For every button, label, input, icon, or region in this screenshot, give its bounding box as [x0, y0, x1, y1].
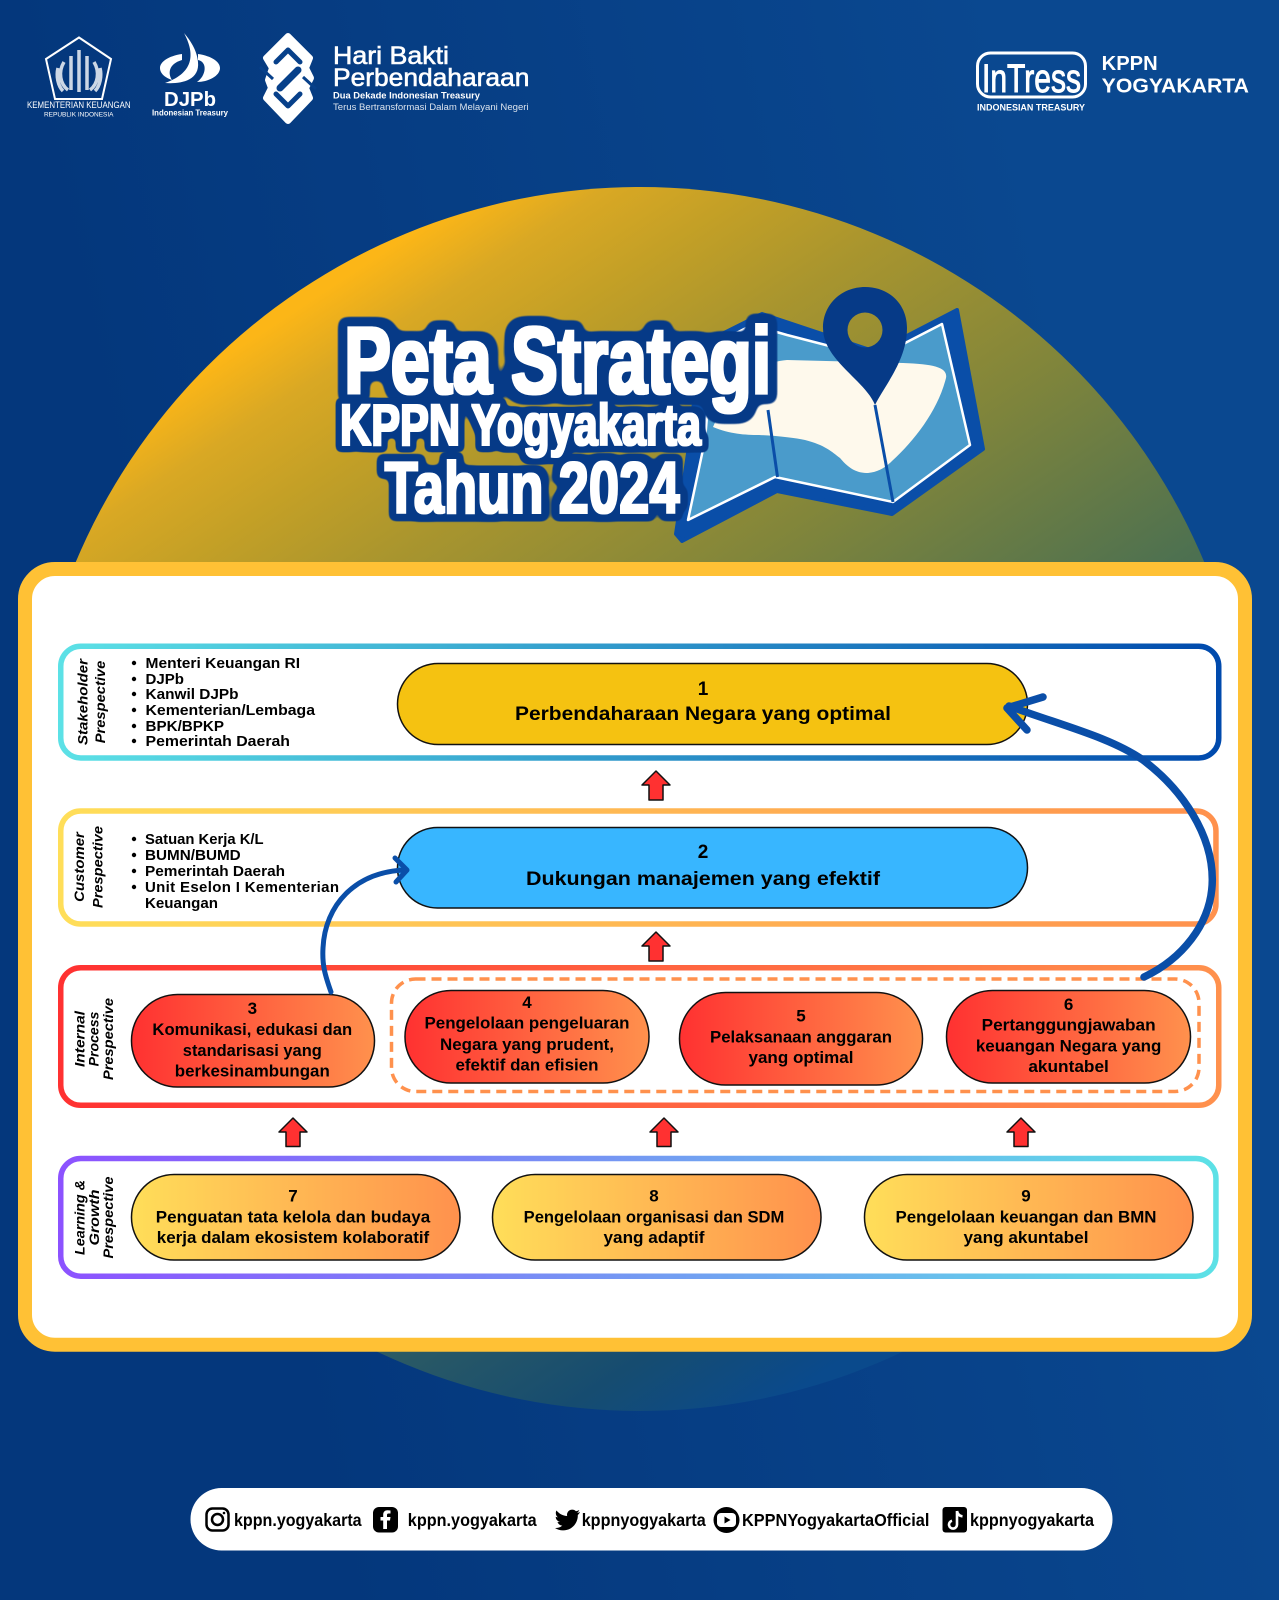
- objective 8: [492, 1174, 821, 1260]
- customer list: Unit Eselon I Kementerian: [145, 879, 339, 896]
- handle: tiktok: kppnyogyakarta: [970, 1510, 1094, 1530]
- logo: Kementerian Keuangan: [27, 38, 131, 119]
- objective 6: [946, 990, 1190, 1083]
- text: KPPN Yogyakarta: [1102, 53, 1249, 98]
- customer list: [132, 831, 339, 912]
- objective 6: 6: [1064, 995, 1073, 1014]
- objective 5: Pelaksanaan anggaran: [710, 1029, 892, 1047]
- row label: learning and growth: Growth: [87, 1190, 102, 1246]
- icon: youtube: [714, 1507, 740, 1533]
- objective 5: yang optimal: [748, 1049, 854, 1067]
- objective 9: [864, 1174, 1193, 1260]
- dashed group outline: [392, 979, 1199, 1092]
- handle: twitter: kppnyogyakarta: [582, 1510, 706, 1530]
- icon: instagram: [206, 1508, 228, 1530]
- customer list: Satuan Kerja K/L: [145, 831, 264, 848]
- row label: customer: Prespective: [90, 825, 106, 908]
- objective 4: efektif dan efisien: [456, 1057, 598, 1075]
- objective 5: [680, 992, 922, 1085]
- row label: internal process: Process: [86, 1011, 102, 1066]
- logo text: Hari Bakti Perbendaharaan: Hari Bakti: [333, 42, 449, 70]
- curved arrow from 6 to 1: [1007, 697, 1212, 977]
- objective 8: 8: [649, 1187, 659, 1206]
- arrow up 7 to 3: [279, 1118, 307, 1146]
- stakeholder list: DJPb: [146, 671, 184, 688]
- icon: facebook: [373, 1507, 398, 1532]
- objective 9: yang akuntabel: [964, 1229, 1088, 1247]
- curved arrow from 3 to 2: [323, 858, 407, 992]
- row label: customer: Customer: [72, 831, 87, 902]
- objective 4: [405, 990, 649, 1083]
- handle: instagram: kppn.yogyakarta: [234, 1510, 362, 1530]
- gradient sun circle: [28, 187, 1252, 1411]
- logo: DJPb: Indonesian Treasury: [152, 107, 228, 117]
- title: [340, 308, 771, 529]
- icon: location pin: [823, 287, 907, 405]
- objective 7: 7: [288, 1187, 298, 1206]
- panel: customer perspective: [61, 811, 1216, 924]
- row label: stakeholder: [76, 658, 108, 745]
- objective 1: 1: [698, 679, 709, 700]
- customer list: Pemerintah Daerah: [145, 863, 285, 880]
- map fold lines: [768, 405, 893, 502]
- logo: InTress: [977, 53, 1086, 114]
- map illustration: [676, 287, 983, 541]
- objective 7: kerja dalam ekosistem kolaboratif: [157, 1229, 430, 1247]
- title: Tahun 2024: [385, 448, 680, 529]
- objective 9: 9: [1021, 1187, 1031, 1206]
- cream land blob: [713, 360, 946, 473]
- row label: internal process: [73, 997, 116, 1080]
- header logos left: [27, 33, 529, 121]
- logo text: Hari Bakti Perbendaharaan: [333, 42, 529, 112]
- handle: facebook: kppn.yogyakarta: [408, 1510, 537, 1530]
- objective 7: Penguatan tata kelola dan budaya: [156, 1209, 431, 1227]
- objective 1: Perbendaharaan Negara yang optimal: [515, 703, 891, 725]
- panel: learning and growth perspective: [61, 1158, 1216, 1276]
- arrow up 9 to row 3: [1007, 1118, 1035, 1146]
- objective 8: yang adaptif: [604, 1229, 705, 1247]
- main white panel: [25, 569, 1245, 1345]
- objective 9: Pengelolaan keuangan dan BMN: [896, 1209, 1156, 1227]
- arrow up 1 to 2: [642, 771, 670, 800]
- objective 3: berkesinambungan: [175, 1063, 330, 1081]
- customer list: BUMN/BUMD: [145, 847, 241, 864]
- logo: DJPb: [152, 33, 228, 117]
- header logos right: InTress and KPPN Yogyakarta: [977, 53, 1249, 114]
- objective 2: [398, 828, 1028, 908]
- stakeholder list: Menteri Keuangan RI: [146, 655, 300, 672]
- stakeholder list: Kanwil DJPb: [146, 686, 238, 703]
- objective 3: Komunikasi, edukasi dan: [152, 1021, 352, 1039]
- stakeholder list: BPK/BPKP: [146, 718, 224, 735]
- objective 3: 3: [248, 999, 257, 1018]
- logo: InTress: InTress: [982, 57, 1081, 101]
- logo text: Hari Bakti Perbendaharaan: Perbendaharaan: [333, 64, 529, 92]
- arrow up 8 to row 3: [650, 1118, 678, 1146]
- logo: InTress: INDONESIAN TREASURY: [977, 103, 1086, 114]
- objective 8: Pengelolaan organisasi dan SDM: [524, 1209, 784, 1227]
- stakeholder list: [132, 655, 316, 750]
- objective 2: Dukungan manajemen yang efektif: [526, 868, 881, 890]
- social media bar: [190, 1488, 1112, 1550]
- objective 3: standarisasi yang: [183, 1042, 322, 1060]
- row label: internal process: Internal: [73, 1011, 88, 1067]
- objective 7: [132, 1174, 460, 1260]
- objective 6: keuangan Negara yang: [976, 1038, 1161, 1056]
- text: KPPN Yogyakarta: KPPN: [1102, 53, 1158, 75]
- logo: Hari Bakti chain: [260, 36, 316, 121]
- title: KPPN Yogyakarta: [340, 393, 702, 458]
- panel: stakeholder perspective: [61, 646, 1219, 758]
- logo: Kementerian Keuangan: KEMENTERIAN KEUANGAN: [27, 100, 131, 110]
- logo: Kementerian Keuangan: REPUBLIK INDONESIA: [44, 112, 114, 119]
- row label: stakeholder: Prespective: [93, 660, 108, 743]
- row label: learning and growth: Prespective: [101, 1176, 116, 1258]
- objective 4: Pengelolaan pengeluaran: [424, 1015, 630, 1033]
- arrow up 2 to 3 row: [642, 932, 670, 961]
- objective 1: [398, 664, 1028, 744]
- objective 5: 5: [796, 1007, 806, 1026]
- stakeholder list: Pemerintah Daerah: [146, 733, 290, 750]
- row label: learning and growth: Learning &: [73, 1180, 88, 1255]
- logo text: Hari Bakti Perbendaharaan: Dua Dekade Indonesian Treasury: [333, 91, 480, 101]
- objective 6: akuntabel: [1028, 1058, 1109, 1076]
- stakeholder list: Kementerian/Lembaga: [146, 702, 316, 719]
- objective 4: Negara yang prudent,: [440, 1036, 614, 1054]
- customer list: Keuangan: [145, 895, 218, 912]
- handle: youtube: KPPNYogyakartaOfficial: [742, 1510, 929, 1530]
- row label: stakeholder: Stakeholder: [76, 658, 90, 745]
- objective 2: 2: [698, 842, 708, 863]
- row label: internal process: Prespective: [101, 997, 116, 1080]
- objective 4: 4: [522, 993, 532, 1012]
- panel: internal process perspective: [61, 968, 1219, 1105]
- text: KPPN Yogyakarta: YOGYAKARTA: [1102, 76, 1249, 98]
- logo text: Hari Bakti Perbendaharaan: Terus Bertransformasi Dalam Melayani Negeri: [333, 102, 529, 112]
- objective 3: [132, 994, 374, 1087]
- objective 6: Pertanggungjawaban: [982, 1017, 1156, 1035]
- row label: customer: [72, 825, 106, 908]
- logo: DJPb: DJPb: [164, 89, 216, 111]
- icon: tiktok: [942, 1507, 967, 1532]
- icon: twitter: [555, 1510, 580, 1530]
- title: Peta Strategi: [344, 308, 771, 414]
- row label: learning and growth: [73, 1176, 116, 1258]
